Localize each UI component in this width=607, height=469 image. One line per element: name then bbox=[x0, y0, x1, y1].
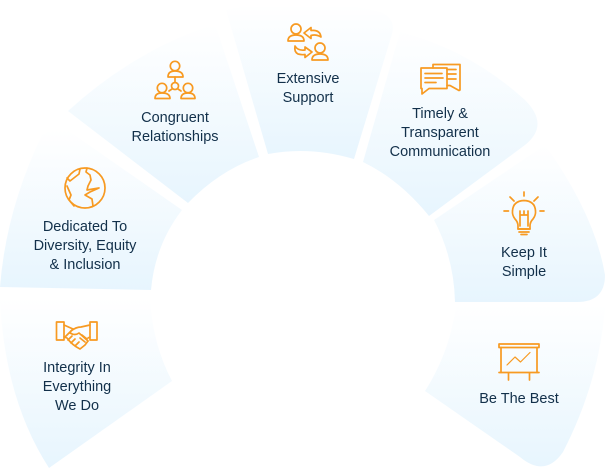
label: timely: Transparent bbox=[401, 125, 479, 141]
label: timely: Timely & bbox=[412, 106, 468, 122]
label: integrity: We Do bbox=[55, 398, 99, 414]
label: integrity: Everything bbox=[43, 379, 111, 395]
icon: chat bubbles bbox=[421, 64, 460, 94]
label: keep it simple: Simple bbox=[502, 264, 546, 280]
icon: globe bbox=[65, 168, 105, 208]
label: congruent: Congruent bbox=[141, 110, 209, 126]
label: extensive: Extensive bbox=[277, 71, 339, 87]
label: timely: Communication bbox=[390, 144, 490, 160]
label: integrity bbox=[43, 360, 111, 414]
label: congruent: Relationships bbox=[131, 129, 219, 145]
label: diversity bbox=[34, 219, 137, 273]
icon: people network bbox=[155, 61, 195, 98]
label: extensive: Support bbox=[283, 90, 333, 106]
panel: integrity in everything we do bbox=[0, 300, 172, 468]
label: be the best: Be The Best bbox=[479, 391, 559, 407]
panel: extensive support bbox=[226, 1, 393, 159]
panel: be the best bbox=[425, 305, 605, 466]
label: diversity: Dedicated To bbox=[43, 219, 127, 235]
label: timely bbox=[390, 106, 490, 160]
icon: presentation board bbox=[499, 344, 539, 380]
label: extensive bbox=[277, 71, 339, 106]
label: integrity: Integrity In bbox=[43, 360, 111, 376]
label: keep it simple: Keep It bbox=[501, 245, 547, 261]
panel: diversity, equity and inclusion bbox=[0, 125, 182, 290]
label: keep it simple bbox=[501, 245, 547, 280]
label: diversity: & Inclusion bbox=[50, 257, 120, 273]
icon: light bulb bbox=[504, 192, 544, 234]
icon: people exchange bbox=[288, 24, 328, 60]
icon: handshake bbox=[56, 322, 97, 349]
label: diversity: Diversity, Equity bbox=[34, 238, 137, 254]
panel: keep it simple bbox=[434, 145, 605, 302]
panel: congruent relationships bbox=[68, 24, 259, 203]
panel: timely and transparent communication bbox=[363, 32, 538, 216]
label: congruent bbox=[131, 110, 219, 145]
